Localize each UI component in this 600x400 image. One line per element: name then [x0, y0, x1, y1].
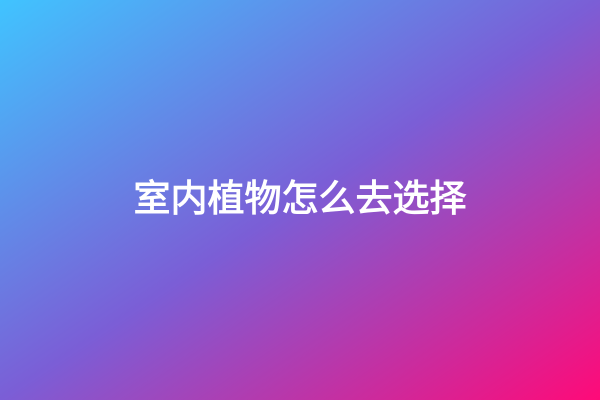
title: 室内植物怎么去选择 [134, 178, 466, 219]
